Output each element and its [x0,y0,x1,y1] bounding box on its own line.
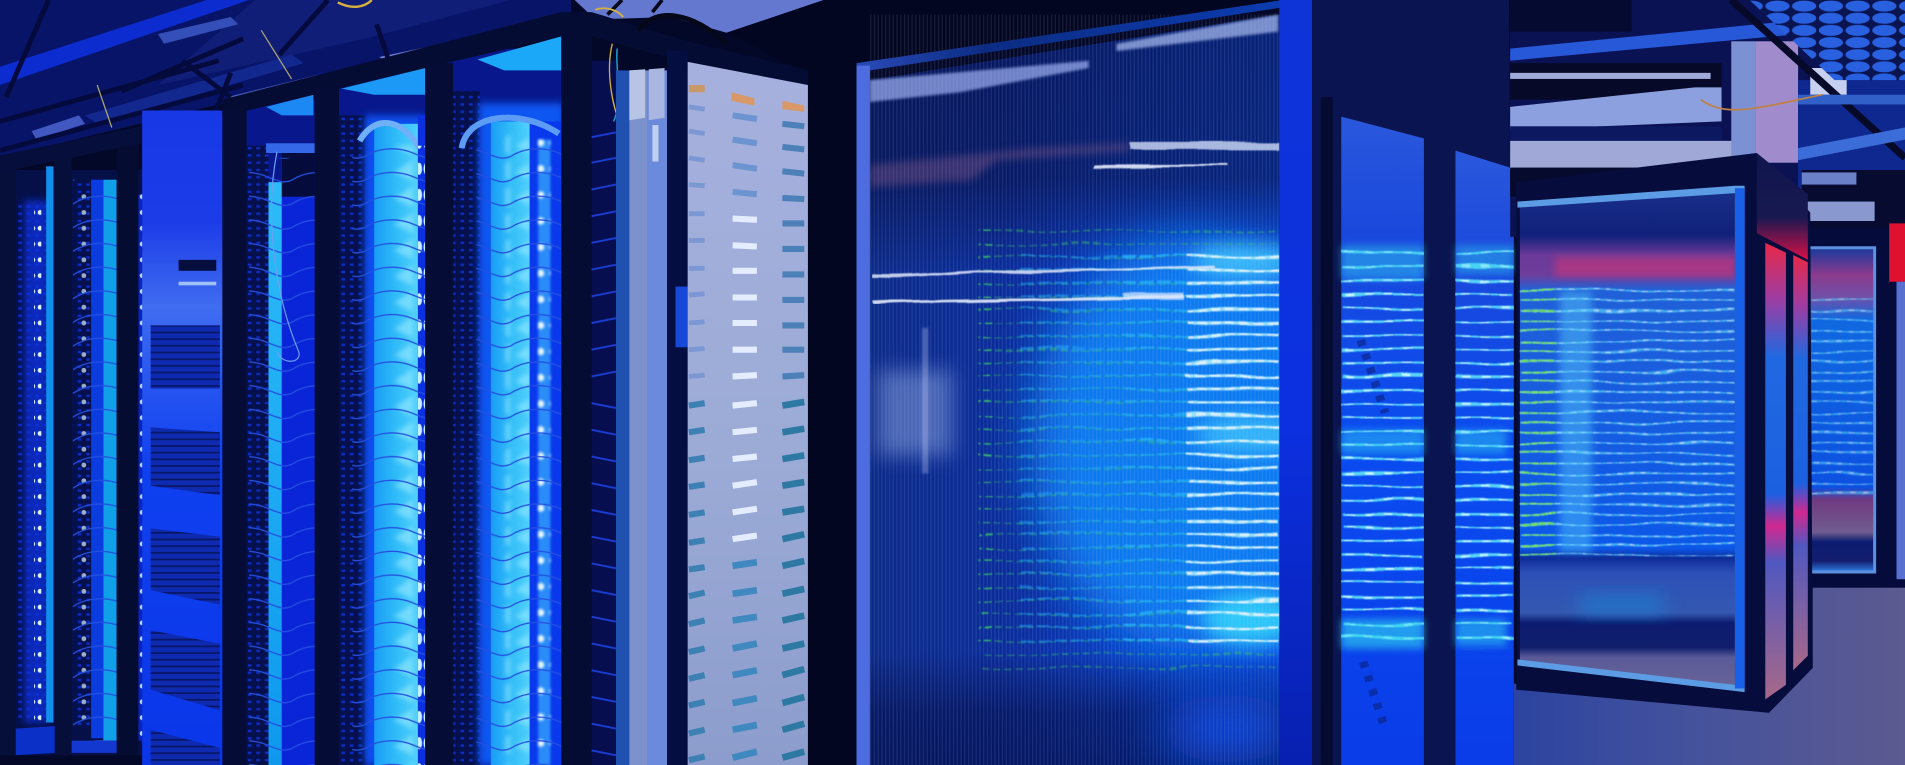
far cabinet glass [1810,249,1873,571]
frame posts [0,158,16,765]
door hinge strip [1321,97,1333,765]
ceiling: left cable tray [0,0,571,158]
ceiling tiles [1749,0,1905,80]
ceiling: right structure [1510,0,1905,237]
glass: ribs [870,15,1279,765]
glass: white reflections [872,141,1279,304]
glass: grey patch [877,370,952,455]
blue door post [1279,0,1312,765]
server slots column [592,44,620,765]
light bay 3 [425,36,565,765]
glass: light glow [1033,237,1349,650]
glass: frame [857,0,1283,765]
vent grilles [151,325,220,389]
louvre column 3 [782,124,804,376]
cables above rack [595,0,727,44]
ceiling: light panel above racks [575,0,824,33]
side glass panel 2 [1455,151,1514,765]
louvre column 1 [689,107,705,376]
second cabinet glass [1520,191,1735,687]
ceiling pillar [1731,41,1756,168]
dark post beside white panel [667,51,688,765]
red side panels [1765,243,1786,699]
orange slots [689,85,705,92]
far-left rack bays [0,126,143,765]
dark gap between cabinets [727,0,1283,765]
second cabinet [1516,153,1813,713]
power unit panel with vents [142,110,224,765]
panel labels [629,69,645,120]
side glass panel 1 [1341,117,1424,765]
far cabinet [1805,223,1905,588]
rack frame posts [222,12,808,765]
floor [1514,583,1905,765]
glass: top reflection band [870,61,1089,102]
white louvre panel [688,62,808,765]
left bay 2 [73,182,103,729]
glass: scan lines [978,219,1279,680]
light bay 1 [224,95,321,765]
large glass cabinet door [857,0,1349,765]
light bay 2 [318,68,434,765]
second cabinet frame [1517,186,1745,692]
louvre column 2 [733,115,757,194]
left bay 1 [16,200,46,722]
silver vertical panels [616,68,667,765]
cabinet dark side [1312,0,1514,765]
